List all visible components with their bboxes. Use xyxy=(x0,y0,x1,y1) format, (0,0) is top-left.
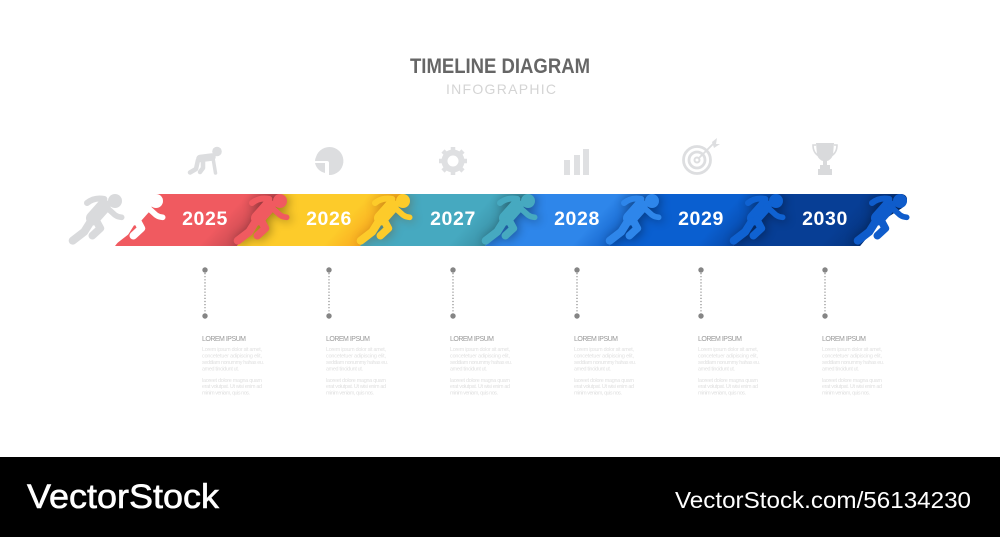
runner: red xyxy=(238,194,287,241)
text block 2027: LOREM IPSUM xyxy=(450,336,494,343)
subtitle: INFOGRAPHIC xyxy=(446,81,556,97)
text block 2028: amed tincidunt ut. xyxy=(574,366,611,372)
connector 2029 xyxy=(698,267,704,319)
text block 2028: seddiam nonummy hahas eu. xyxy=(574,360,636,366)
icon: bar chart xyxy=(564,149,589,175)
text block 2026: laoreet dolore magna quam xyxy=(326,378,386,384)
runner: teal xyxy=(486,194,535,241)
icon: gear xyxy=(439,147,467,175)
text block 2026: seddiam nonummy hahas eu. xyxy=(326,360,388,366)
icon: pie chart xyxy=(315,147,343,175)
connector 2030 xyxy=(822,267,828,319)
text block 2030: laoreet dolore magna quam xyxy=(822,378,882,384)
connector 2028 xyxy=(574,267,580,319)
text block 2027: laoreet dolore magna quam xyxy=(450,378,510,384)
runner: blue xyxy=(610,194,659,241)
text block 2029: amed tincidunt ut. xyxy=(698,366,735,372)
text block 2027: amed tincidunt ut. xyxy=(450,366,487,372)
segment: 2030 navy xyxy=(733,194,907,246)
text block 2028 xyxy=(574,336,636,396)
text block 2026: amed tincidunt ut. xyxy=(326,366,363,372)
text block 2026: minim veniam, quis nos. xyxy=(326,390,374,396)
text block 2025 xyxy=(202,336,264,396)
icon: target with arrow xyxy=(684,138,720,174)
text block 2028: LOREM IPSUM xyxy=(574,336,618,343)
text block 2026: concetetuer adipiscing elit, xyxy=(326,354,386,360)
text block 2030: LOREM IPSUM xyxy=(822,336,866,343)
segment: 2026 yellow xyxy=(237,194,403,246)
text block 2030 xyxy=(822,336,884,396)
text block 2026: Lorem ipsum dolor sit amet, xyxy=(326,347,386,353)
text block 2030: erat volutpat. Ut wisi enim ad xyxy=(822,384,882,390)
segment: 2027 teal xyxy=(360,194,528,246)
icon: trophy xyxy=(813,143,837,175)
text block 2029 xyxy=(698,336,760,396)
text block 2027: erat volutpat. Ut wisi enim ad xyxy=(450,384,510,390)
footer bar xyxy=(0,457,1000,537)
runner: yellow xyxy=(361,194,410,241)
text block 2029: seddiam nonummy hahas eu. xyxy=(698,360,760,366)
text block 2025: laoreet dolore magna quam xyxy=(202,378,262,384)
footer image id: VectorStock.com/56134230 xyxy=(675,487,971,513)
text block 2028: erat volutpat. Ut wisi enim ad xyxy=(574,384,634,390)
text block 2029: minim veniam, quis nos. xyxy=(698,390,746,396)
year 2029: 2029 xyxy=(678,208,724,230)
text block 2029: erat volutpat. Ut wisi enim ad xyxy=(698,384,758,390)
text block 2030: amed tincidunt ut. xyxy=(822,366,859,372)
connector 2025 xyxy=(202,267,208,319)
text block 2025: Lorem ipsum dolor sit amet, xyxy=(202,347,262,353)
icon: crouching runner xyxy=(190,147,222,173)
footer brand: VectorStock xyxy=(27,478,220,516)
title: TIMELINE DIAGRAM xyxy=(410,55,590,78)
text block 2026: LOREM IPSUM xyxy=(326,336,370,343)
text block 2030: minim veniam, quis nos. xyxy=(822,390,870,396)
text block 2029: Lorem ipsum dolor sit amet, xyxy=(698,347,758,353)
text block 2028: minim veniam, quis nos. xyxy=(574,390,622,396)
text block 2025: minim veniam, quis nos. xyxy=(202,390,250,396)
text block 2025: erat volutpat. Ut wisi enim ad xyxy=(202,384,262,390)
text block 2027: concetetuer adipiscing elit, xyxy=(450,354,510,360)
text block 2025: seddiam nonummy hahas eu. xyxy=(202,360,264,366)
text block 2029: concetetuer adipiscing elit, xyxy=(698,354,758,360)
text block 2025: concetetuer adipiscing elit, xyxy=(202,354,262,360)
text block 2027: minim veniam, quis nos. xyxy=(450,390,498,396)
segment: 2029 strong blue xyxy=(609,194,776,246)
timeline band xyxy=(115,194,907,246)
text block 2028: Lorem ipsum dolor sit amet, xyxy=(574,347,634,353)
runner: white xyxy=(114,194,163,241)
year 2030: 2030 xyxy=(802,208,848,230)
year 2025: 2025 xyxy=(182,208,228,230)
text block 2026: erat volutpat. Ut wisi enim ad xyxy=(326,384,386,390)
text block 2025: LOREM IPSUM xyxy=(202,336,246,343)
text block 2030: Lorem ipsum dolor sit amet, xyxy=(822,347,882,353)
connector 2027 xyxy=(450,267,456,319)
segment: 2025 red xyxy=(115,194,280,246)
runner: strong blue xyxy=(734,194,783,241)
year 2028: 2028 xyxy=(554,208,600,230)
text block 2029: laoreet dolore magna quam xyxy=(698,378,758,384)
text block 2028: concetetuer adipiscing elit, xyxy=(574,354,634,360)
text block 2030: concetetuer adipiscing elit, xyxy=(822,354,882,360)
connector 2026 xyxy=(326,267,332,319)
text block 2027: seddiam nonummy hahas eu. xyxy=(450,360,512,366)
year 2026: 2026 xyxy=(306,208,352,230)
runner shadows xyxy=(240,195,907,242)
year 2027: 2027 xyxy=(430,208,476,230)
text block 2028: laoreet dolore magna quam xyxy=(574,378,634,384)
runner: grey start xyxy=(73,194,122,241)
text block 2026 xyxy=(326,336,388,396)
runner: final blue xyxy=(858,194,907,241)
text block 2029: LOREM IPSUM xyxy=(698,336,742,343)
text block 2027: Lorem ipsum dolor sit amet, xyxy=(450,347,510,353)
segment: 2028 blue xyxy=(485,194,652,246)
text block 2030: seddiam nonummy hahas eu. xyxy=(822,360,884,366)
text block 2027 xyxy=(450,336,512,396)
text block 2025: amed tincidunt ut. xyxy=(202,366,239,372)
